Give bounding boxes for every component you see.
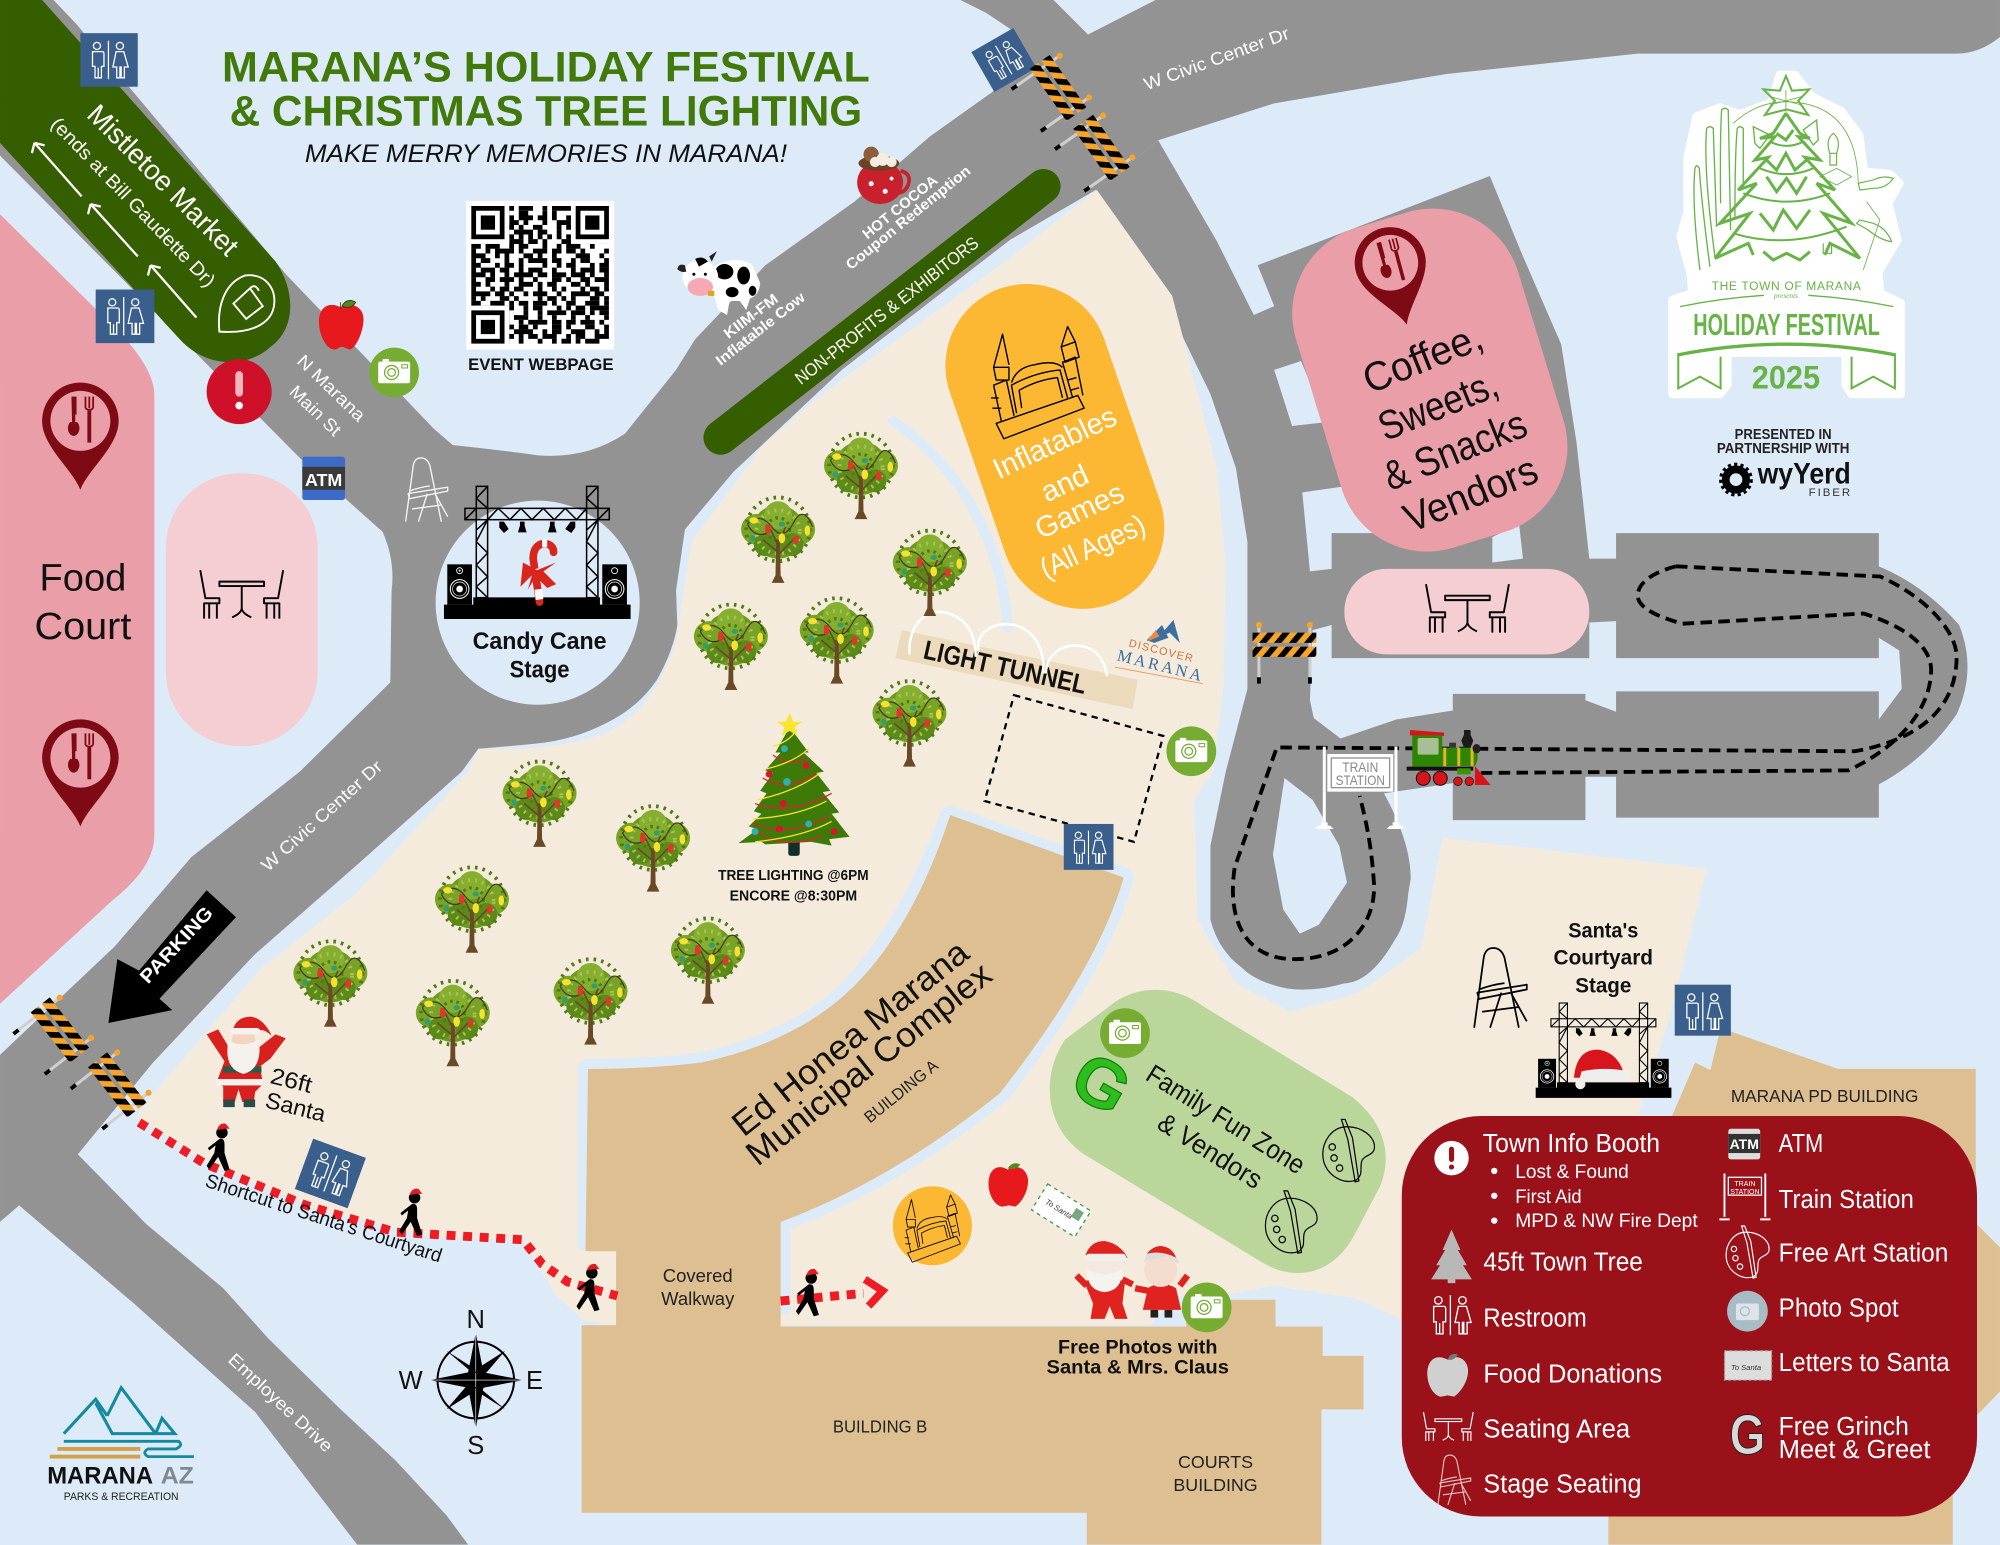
santa's courtyard stage — [1536, 917, 1671, 1098]
light tunnel: LIGHT TUNNEL — [921, 635, 1089, 700]
logo: wyyerd fiber: wyYerd — [1757, 457, 1851, 490]
text: tree lighting: ENCORE @8:30PM — [730, 888, 857, 904]
legend: info booth: Lost & Found — [1515, 1162, 1629, 1183]
logo: marana parks and recreation: AZ — [161, 1462, 194, 1489]
icon: black chair — [1474, 948, 1527, 1028]
text: mistletoe market: Mistletoe Market — [81, 98, 245, 262]
building A outline gap — [588, 816, 1124, 1314]
icon: food court pin bottom — [42, 719, 119, 827]
panel: inflatables: (All Ages) — [1035, 508, 1151, 585]
road labels — [224, 23, 1292, 1456]
text: vendors: Coffee, — [1356, 313, 1489, 402]
panel: festival grounds — [136, 190, 1707, 1325]
road: east lot and train track road — [1096, 140, 1968, 990]
candy cane stage — [436, 486, 640, 705]
legend: info booth: Town Info Booth — [1483, 1130, 1660, 1158]
panel: coffee vendors — [1270, 186, 1590, 574]
logo: marana parks and recreation: PARKS & RECREATION — [64, 1491, 179, 1503]
icon: compass: E — [526, 1367, 543, 1395]
legend: photo spot: Photo Spot — [1779, 1294, 1899, 1322]
road labels: Employee Drive — [224, 1349, 337, 1456]
icon: ATM: ATM — [305, 470, 342, 490]
logo: discover marana — [1115, 620, 1206, 686]
legend: seating area: Seating Area — [1483, 1415, 1631, 1443]
legend: food donations: Food Donations — [1483, 1361, 1662, 1389]
icon: photo spot santa — [1182, 1283, 1232, 1332]
road labels: W Civic Center Dr — [1141, 23, 1292, 94]
icon: info booth — [207, 359, 272, 424]
text: presented in partnership: PRESENTED IN — [1735, 427, 1832, 443]
building: PD main — [1658, 1028, 1976, 1403]
text: free photos — [1047, 1336, 1229, 1379]
legend: ATM: ATM — [1730, 1136, 1759, 1152]
photo spots — [1100, 726, 1216, 1058]
text: PD building: MARANA PD BUILDING — [1731, 1086, 1918, 1106]
legend: food donations — [1427, 1354, 1662, 1397]
icon: shopping tag — [219, 275, 274, 332]
panel: mistletoe market — [0, 0, 290, 362]
restroom — [971, 28, 1036, 92]
legend: train station: TRAIN — [1734, 1181, 1755, 1188]
road labels: Main St — [285, 381, 345, 440]
icon: letter to santa — [1031, 1184, 1091, 1237]
icon: santa and mrs claus — [1077, 1241, 1187, 1319]
title block — [222, 44, 870, 168]
legend: art station: Free Art Station — [1779, 1239, 1948, 1267]
building: municipal complex: Walkway — [661, 1288, 735, 1309]
icon: small apple — [989, 1163, 1028, 1207]
road labels: Inflatable Cow — [713, 289, 809, 369]
icon: compass — [399, 1306, 543, 1460]
candy cane stage: Stage — [510, 656, 570, 682]
QR code — [466, 201, 614, 374]
icon: compass: W — [399, 1367, 423, 1395]
road labels: HOT COCOA — [860, 172, 942, 243]
text: building B: BUILDING B — [833, 1416, 927, 1436]
logo: holiday festival badge: HOLIDAY FESTIVAL — [1693, 308, 1880, 342]
text: food court: Food — [40, 557, 126, 600]
shortcut dotted path — [139, 1122, 883, 1306]
legend: town tree — [1431, 1230, 1643, 1283]
icon: 26ft santa — [207, 1017, 329, 1127]
logo: discover marana: MARANA — [1115, 646, 1206, 686]
icon: palette — [1323, 1119, 1374, 1182]
road labels: N Marana — [293, 351, 369, 425]
building: bottom right — [1608, 1480, 1953, 1545]
legend: train station — [1719, 1173, 1914, 1219]
legend: art station — [1726, 1226, 1948, 1278]
icon: ATM — [302, 457, 345, 500]
icon: food court pin top — [42, 383, 119, 490]
panel: inflatables: and — [1036, 458, 1094, 509]
panel: inflatables: Games — [1030, 476, 1129, 546]
logo: holiday festival badge — [1673, 75, 1901, 395]
legend: info booth: MPD & NW Fire Dept — [1515, 1211, 1698, 1232]
icon: compass: S — [467, 1432, 484, 1460]
legend: photo spot — [1727, 1291, 1899, 1332]
text: shortcut: Shortcut to Santa's Courtyard — [203, 1170, 445, 1267]
icon: letter to santa: To Santa — [1044, 1197, 1074, 1221]
train station sign: STATION — [1336, 773, 1385, 788]
legend: stage seating: Stage Seating — [1483, 1470, 1642, 1498]
train track — [1233, 566, 1957, 959]
lot gaps — [1274, 361, 1902, 739]
legend: grinch: G — [1730, 1403, 1765, 1466]
text: candy cane stage: Candy Cane — [473, 628, 607, 654]
text: ends at: (ends at Bill Gaudette Dr) — [46, 114, 219, 292]
legend: train station: Train Station — [1779, 1186, 1914, 1214]
text: presented in partnership — [1717, 427, 1849, 457]
title block: & CHRISTMAS TREE LIGHTING — [230, 88, 862, 136]
logo: discover marana: DISCOVER — [1128, 638, 1195, 665]
road labels: KIIM-FM — [721, 291, 782, 342]
santa's courtyard stage: Courtyard — [1554, 944, 1653, 969]
text: tree lighting: TREE LIGHTING @6PM — [718, 868, 869, 884]
train station sign — [1315, 747, 1405, 829]
logo: holiday festival badge: 2025 — [1752, 359, 1820, 395]
legend: grinch: Meet & Greet — [1779, 1436, 1930, 1464]
legend: stage seating — [1438, 1455, 1642, 1505]
legend: info booth: First Aid — [1515, 1187, 1582, 1208]
legend: letters: To Santa — [1731, 1363, 1761, 1372]
panel: family fun zone: & Vendors — [1152, 1107, 1268, 1195]
panel: inflatables — [923, 262, 1186, 631]
restroom — [1064, 824, 1114, 870]
text: covered walkway: Covered — [663, 1265, 733, 1286]
christmas tree — [739, 713, 849, 856]
icon: vendor pin — [1347, 219, 1441, 334]
text: courts building: COURTS — [1178, 1452, 1253, 1472]
legend: seating area — [1423, 1412, 1631, 1443]
icon: candy cane — [520, 543, 556, 602]
building: right edge — [1952, 1212, 2000, 1441]
text: free photos: Santa & Mrs. Claus — [1047, 1357, 1229, 1379]
icon: train — [1407, 730, 1491, 786]
panel: coffee vendors: Vendors — [1397, 446, 1544, 541]
panel: food court — [0, 214, 154, 1004]
icon: table — [1426, 584, 1509, 633]
icon: compass: N — [467, 1306, 485, 1334]
train station sign: TRAIN — [1342, 760, 1378, 775]
text: Ed Honea Marana Municipal Complex: Ed Honea Marana — [725, 933, 977, 1144]
icon: cocoa mug — [857, 147, 909, 204]
legend: restroom — [1433, 1295, 1587, 1335]
panel: east seating — [1344, 569, 1589, 654]
icon: photo spot west — [369, 348, 419, 397]
road labels: Coupon Redemption — [843, 163, 974, 274]
panel: coffee vendors: Sweets, — [1371, 360, 1504, 450]
panel: west seating — [166, 473, 318, 746]
icon: cow — [677, 251, 760, 315]
legend: info booth — [1434, 1130, 1698, 1232]
text: free photos: Free Photos with — [1058, 1336, 1217, 1358]
logo: marana parks and recreation: MARANA — [47, 1462, 153, 1489]
restrooms — [80, 33, 138, 87]
dotted santa village area — [985, 695, 1163, 842]
icon: 26ft santa: Santa — [263, 1087, 329, 1127]
trees — [293, 434, 967, 1066]
restroom — [295, 1139, 366, 1208]
text: building A: BUILDING A — [860, 1055, 942, 1127]
icon: santa hat — [1574, 1050, 1629, 1089]
panel: legend — [1402, 1116, 1977, 1517]
road: north top — [1088, 0, 2000, 140]
subtitle: MAKE MERRY MEMORIES IN MARANA! — [305, 140, 787, 168]
text: tree lighting — [718, 868, 869, 904]
building: municipal complex: Municipal Complex — [739, 955, 999, 1173]
bar: non-profits and exhibitors: NON-PROFITS & EXHIBITORS — [791, 233, 982, 388]
light tunnel — [895, 612, 1138, 709]
badge text: THE TOWN OF MARANA — [1712, 279, 1862, 293]
icon: small inflatable — [893, 1186, 972, 1265]
parking arrow — [108, 890, 236, 1023]
legend: letters — [1724, 1349, 1950, 1380]
arrows — [32, 143, 196, 318]
blue path by tunnel — [893, 421, 1008, 628]
restroom — [1675, 985, 1731, 1036]
icon: grinch G: G — [1059, 1037, 1144, 1130]
icon: table — [200, 570, 283, 619]
panel: family fun zone — [1050, 990, 1386, 1273]
legend: letters: Letters to Santa — [1779, 1349, 1950, 1377]
legend: grinch: Free Grinch — [1779, 1413, 1909, 1441]
icon: palette — [1265, 1191, 1317, 1253]
legend: ATM: ATM — [1779, 1130, 1823, 1158]
road labels: W Civic Center Dr — [257, 756, 386, 875]
legend: restroom: Restroom — [1483, 1305, 1587, 1333]
bar: non-profits and exhibitors — [721, 186, 1043, 437]
bulbs — [1823, 133, 1893, 253]
panel: food court: Court — [34, 605, 132, 648]
title block: MARANA’S HOLIDAY FESTIVAL — [222, 44, 870, 92]
icon: white chair — [406, 458, 448, 522]
legend: ATM — [1728, 1129, 1823, 1159]
road: west, roundabout and main — [0, 0, 1158, 1545]
legend: train station: STATION — [1730, 1189, 1760, 1196]
logo: wyyerd fiber — [1721, 457, 1852, 499]
QR caption: EVENT WEBPAGE — [468, 355, 614, 374]
building: municipal complex: BUILDING — [1173, 1475, 1258, 1495]
text: santa's courtyard stage: Santa's — [1568, 917, 1638, 942]
legend: grinch — [1730, 1403, 1930, 1466]
barriers — [10, 49, 1316, 1134]
icon: apple — [319, 300, 364, 349]
logo: holiday festival badge: presents — [1773, 291, 1798, 300]
parking arrow: PARKING — [136, 903, 218, 988]
text: 26ft santa: 26ft — [268, 1063, 316, 1098]
logo: wyyerd fiber: FIBER — [1809, 487, 1852, 499]
star and tree — [1763, 76, 1809, 115]
panel: coffee vendors: & Snacks — [1376, 400, 1533, 499]
legend: town tree: 45ft Town Tree — [1483, 1248, 1643, 1276]
cacti — [1694, 108, 1818, 270]
text: family fun: Family Fun Zone — [1141, 1059, 1310, 1180]
icon: castle — [991, 327, 1084, 439]
logo: marana parks and recreation — [47, 1388, 194, 1503]
text: inflatables: Inflatables — [988, 400, 1122, 486]
walkers — [207, 1124, 819, 1316]
text: presented in partnership: PARTNERSHIP WITH — [1717, 441, 1849, 457]
santa's courtyard stage: Stage — [1575, 972, 1631, 997]
restroom — [96, 290, 154, 343]
building: municipal complex — [582, 815, 1364, 1545]
